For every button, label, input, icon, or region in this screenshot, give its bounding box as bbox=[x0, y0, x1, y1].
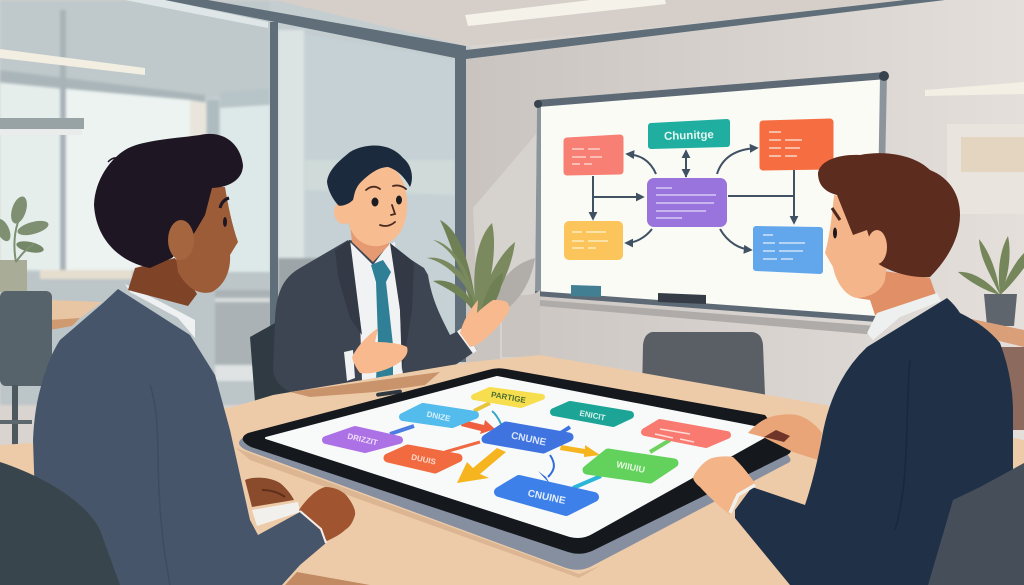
box: yellow bbox=[564, 221, 623, 260]
near hand bbox=[299, 487, 355, 541]
hand on bezel bbox=[693, 456, 755, 515]
plant right bbox=[958, 236, 1024, 326]
ceiling bbox=[0, 0, 270, 98]
node: blue lower: CNUINE bbox=[527, 488, 567, 507]
face bbox=[172, 185, 238, 293]
node: cyan: DNIZE bbox=[426, 410, 452, 424]
far hand bbox=[245, 478, 294, 507]
cuff left bbox=[344, 350, 355, 381]
node: blue lower bbox=[499, 480, 594, 511]
hair bbox=[94, 134, 243, 268]
conference table bbox=[0, 355, 1024, 585]
node: purple bbox=[326, 430, 399, 449]
node: teal bbox=[554, 405, 630, 423]
paper under hand bbox=[252, 502, 300, 526]
background chair left bbox=[0, 291, 52, 445]
box: orange bbox=[763, 122, 830, 167]
person right bbox=[693, 153, 1024, 585]
face bbox=[825, 195, 890, 298]
jacket bbox=[273, 240, 477, 392]
box: teal title bbox=[651, 122, 727, 146]
ear bbox=[334, 200, 354, 224]
box: red bbox=[567, 138, 620, 172]
eye and brow bbox=[223, 217, 227, 227]
cuff bbox=[300, 511, 326, 543]
eyes brows mouth bbox=[366, 185, 406, 226]
ear bbox=[168, 220, 194, 260]
hand: right bbox=[460, 300, 509, 347]
tablet connectors bbox=[390, 403, 670, 488]
lapels bbox=[335, 240, 414, 372]
box: blue bbox=[756, 229, 820, 271]
eraser bbox=[571, 285, 601, 297]
node: yellow bbox=[474, 390, 542, 405]
hand on tablet bbox=[748, 414, 822, 460]
hair bbox=[327, 146, 412, 206]
inner pane bbox=[278, 30, 455, 350]
chair left foreground bbox=[0, 462, 120, 585]
node: blue centre bbox=[486, 426, 569, 449]
head bbox=[346, 165, 407, 246]
collar bbox=[867, 293, 941, 340]
node: yellow: PARTIGE bbox=[490, 390, 527, 405]
glass meeting room background bbox=[0, 0, 470, 405]
plant left bbox=[0, 195, 50, 292]
node: salmon bbox=[645, 423, 727, 444]
background desk left bbox=[50, 300, 102, 330]
hand: left bbox=[352, 328, 408, 373]
hair bbox=[818, 153, 960, 277]
cuff right bbox=[459, 330, 475, 352]
box: teal title: Chunitge bbox=[664, 129, 714, 143]
presenter chair bbox=[250, 322, 295, 402]
tablet arrows bbox=[461, 420, 495, 434]
jacket bbox=[735, 298, 1024, 585]
jacket bbox=[33, 289, 326, 585]
marker bbox=[658, 293, 706, 304]
neck bbox=[857, 270, 936, 315]
node: green: WIIUIU bbox=[615, 459, 646, 475]
node: purple: DRIZZIT bbox=[347, 432, 379, 447]
node: orange: DUUIS bbox=[410, 453, 437, 467]
node: blue centre: CNUNE bbox=[510, 430, 547, 449]
brow and eye bbox=[832, 208, 840, 220]
neck bbox=[128, 258, 197, 306]
tablet bbox=[239, 368, 791, 570]
chair back centre bbox=[642, 332, 765, 395]
pen on table bbox=[376, 389, 402, 397]
wall poster bbox=[947, 124, 1024, 214]
right wall and ceiling bbox=[275, 0, 1024, 450]
node: green bbox=[587, 453, 674, 479]
ceiling lights bbox=[0, 0, 268, 135]
node: orange bbox=[388, 449, 458, 469]
tablet casing bbox=[239, 375, 790, 570]
chair right foreground bbox=[928, 463, 1024, 585]
whiteboard arrows bbox=[593, 148, 794, 250]
far desk and floor bbox=[0, 272, 272, 405]
cuff bbox=[730, 485, 755, 513]
neck bbox=[350, 225, 389, 262]
node: teal: ENICIT bbox=[579, 409, 606, 422]
person left bbox=[0, 134, 355, 585]
windows bbox=[0, 83, 60, 270]
whiteboard bbox=[534, 71, 889, 335]
node: cyan bbox=[403, 407, 475, 424]
shirt bbox=[348, 240, 403, 381]
collar bbox=[125, 284, 195, 338]
window frame bbox=[165, 0, 466, 362]
presenter bbox=[273, 146, 509, 392]
box: purple centre bbox=[647, 178, 727, 227]
tablet screen bbox=[266, 377, 775, 537]
plant behind presenter bbox=[427, 220, 540, 362]
side desk right bbox=[967, 318, 1024, 430]
ear bbox=[867, 230, 887, 264]
tie bbox=[371, 260, 393, 380]
